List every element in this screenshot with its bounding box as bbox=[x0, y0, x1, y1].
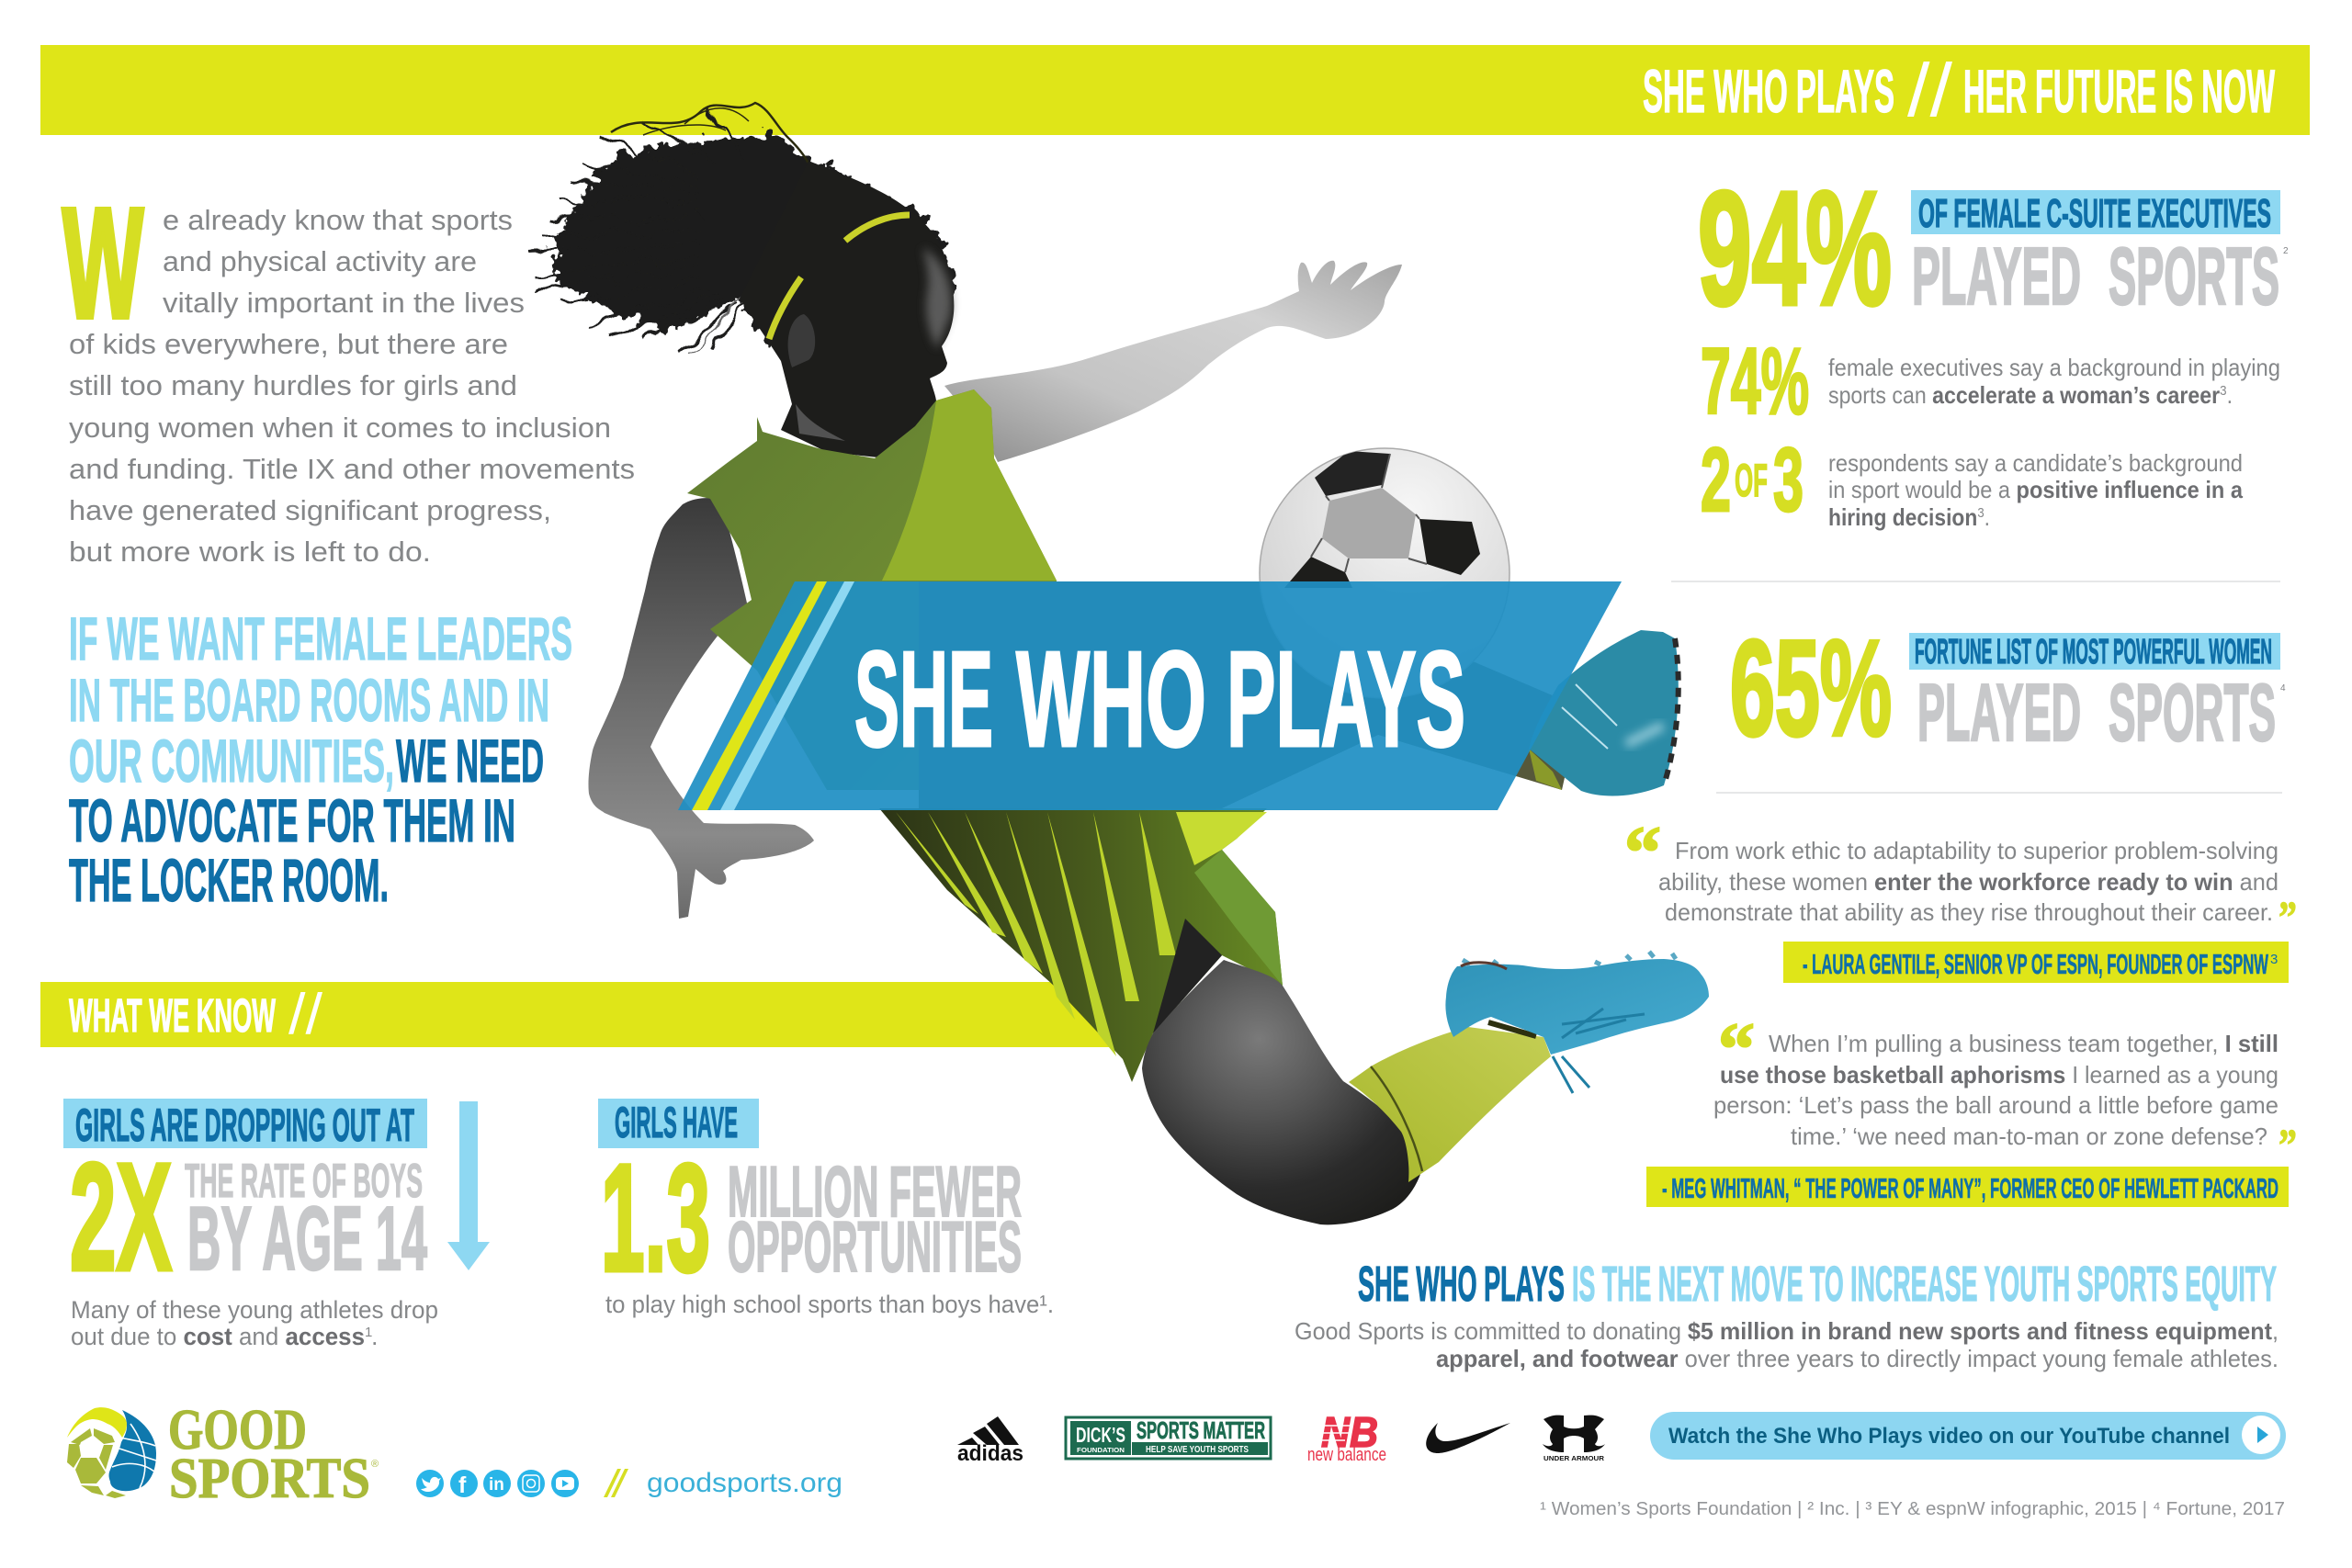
icon: linkedin bbox=[483, 1470, 511, 1497]
million fewer opportunities: MILLION FEWER bbox=[728, 1151, 1022, 1232]
footnotes: ¹ Women’s Sports Foundation | ² Inc. | ³ EY & espnW infographic, 2015 | ⁴ Fortune, 2017 bbox=[1540, 1499, 2285, 1519]
call to action headline: THE LOCKER ROOM. bbox=[69, 846, 389, 914]
quote one bbox=[1624, 813, 2297, 983]
stat: 94 percent bbox=[1698, 159, 2289, 339]
2 of 3 description: . bbox=[1984, 503, 1990, 531]
icon: facebook bbox=[450, 1470, 478, 1498]
shirt highlight bbox=[882, 389, 1057, 581]
quote text: use those basketball aphorisms I learned as a young bbox=[1720, 1061, 2278, 1089]
logo: dick's sports matter: DICK’S bbox=[1076, 1423, 1125, 1447]
logo wordmark: ® bbox=[371, 1459, 379, 1470]
logo wordmark: SPORTS bbox=[169, 1448, 370, 1510]
icon: play bbox=[2242, 1416, 2280, 1454]
logo: dick's sports matter: FOUNDATION bbox=[1077, 1448, 1125, 1454]
sock bbox=[1349, 1022, 1551, 1182]
player photo illustration bbox=[535, 103, 1709, 1224]
2 of 3 description bbox=[1828, 449, 2243, 531]
logo: adidas bbox=[957, 1416, 1023, 1466]
quote text: demonstrate that ability as they rise throughout their career. bbox=[1665, 898, 2273, 926]
intro paragraph: of kids everywhere, but there are bbox=[69, 328, 508, 360]
banner title bbox=[854, 624, 1465, 775]
logo: adidas: adidas bbox=[957, 1441, 1023, 1466]
number 2 of 3: OF bbox=[1735, 455, 1768, 506]
lower leg behind banner bbox=[919, 581, 1580, 808]
quote text: person: ‘Let’s pass the ball around a little before game bbox=[1713, 1091, 2278, 1119]
label: girls are dropping out bbox=[63, 1099, 427, 1151]
stat: dropping out at 2x bbox=[63, 1099, 490, 1350]
intro paragraph: vitally important in the lives bbox=[163, 287, 525, 319]
banner stripes bbox=[692, 581, 854, 810]
quote two bbox=[1646, 1010, 2297, 1207]
logo wordmark bbox=[168, 1399, 379, 1510]
what we know heading bbox=[69, 983, 323, 1046]
call to action headline: OUR COMMUNITIES, bbox=[69, 727, 394, 795]
shirt bbox=[687, 389, 1057, 790]
what we know heading: WHAT WE KNOW bbox=[69, 989, 276, 1042]
central banner bbox=[678, 581, 1622, 810]
call to action headline: IN THE BOARD ROOMS AND IN bbox=[69, 666, 549, 734]
number 74%: 74% bbox=[1701, 329, 1809, 434]
right arm bbox=[944, 261, 1402, 462]
what we know bar bbox=[40, 982, 1143, 1047]
dropout note: out due to cost and access bbox=[71, 1323, 365, 1350]
equity paragraph: Good Sports is committed to donating $5 million in brand new sports and fitness equipment, bbox=[1295, 1317, 2278, 1345]
front boot bbox=[1445, 952, 1709, 1093]
social icons bbox=[416, 1470, 579, 1498]
neck and face bbox=[740, 161, 954, 458]
played sports: PLAYED bbox=[1917, 667, 2081, 758]
stat: 65 percent bbox=[1730, 613, 2286, 764]
opportunities note: to play high school sports than boys have¹. bbox=[605, 1291, 1054, 1318]
arrow: down bbox=[447, 1101, 490, 1270]
logo ball bbox=[67, 1407, 156, 1498]
logo wordmark: GOOD bbox=[168, 1399, 307, 1461]
label: girls have: GIRLS HAVE bbox=[615, 1098, 738, 1146]
quote mark: “ bbox=[1718, 1010, 1755, 1090]
logo: new balance: NB bbox=[1321, 1408, 1378, 1456]
intro drop cap: W bbox=[62, 176, 143, 351]
2 of 3 description: respondents say a candidate’s background bbox=[1828, 449, 2243, 477]
quote text bbox=[1658, 837, 2278, 926]
attribution bbox=[1783, 942, 2289, 983]
shorts bbox=[879, 808, 1283, 1082]
icon: linkedin: in bbox=[489, 1475, 504, 1495]
call to action headline: TO ADVOCATE FOR THEM IN bbox=[69, 786, 515, 854]
good sports logo bbox=[67, 1399, 379, 1510]
header title bbox=[1643, 49, 2275, 132]
dropout note: 1 bbox=[365, 1325, 372, 1340]
2 of 3 description: 3 bbox=[1977, 505, 1984, 521]
quote text bbox=[1713, 1030, 2278, 1150]
left arm and hand bbox=[588, 498, 814, 919]
rear boot bbox=[1529, 630, 1679, 796]
logo: dick's sports matter bbox=[1066, 1416, 1271, 1459]
header title: // bbox=[1907, 49, 1952, 132]
header title: SHE WHO PLAYS bbox=[1643, 57, 1894, 125]
million fewer opportunities bbox=[728, 1151, 1022, 1287]
label: girls are dropping out: GIRLS ARE DROPPING OUT AT bbox=[75, 1100, 414, 1151]
number 2 of 3 bbox=[1701, 429, 1804, 530]
stat: 94 percent: 2 bbox=[2283, 246, 2289, 256]
call to action headline: IF WE WANT FEMALE LEADERS bbox=[69, 604, 572, 672]
header bar bbox=[40, 45, 2310, 135]
million fewer opportunities: OPPORTUNITIES bbox=[728, 1206, 1022, 1287]
intro paragraph: have generated significant progress, bbox=[69, 494, 551, 526]
dropout note: Many of these young athletes drop bbox=[71, 1296, 438, 1324]
label: girls have bbox=[598, 1098, 759, 1148]
stat: 65 percent: 4 bbox=[2280, 683, 2286, 694]
intro paragraph: but more work is left to do. bbox=[69, 536, 431, 568]
attribution: 3 bbox=[2270, 952, 2278, 967]
number 1.3: 1.3 bbox=[601, 1134, 710, 1303]
logo: dick's sports matter: HELP SAVE YOUTH SPORTS bbox=[1146, 1445, 1249, 1455]
74 percent description: . bbox=[2227, 381, 2233, 409]
intro paragraph bbox=[69, 204, 635, 568]
video button: Watch the She Who Plays video on our YouTube channel bbox=[1668, 1424, 2230, 1449]
logo: new balance: new balance bbox=[1307, 1445, 1386, 1465]
intro paragraph: and physical activity are bbox=[163, 245, 477, 277]
close quote: ” bbox=[2278, 891, 2297, 942]
intro paragraph: and funding. Title IX and other movements bbox=[69, 453, 635, 485]
quote text: When I’m pulling a business team together, I still bbox=[1769, 1030, 2278, 1057]
banner title: WHO bbox=[1016, 624, 1206, 775]
74 percent description: sports can accelerate a woman’s career bbox=[1828, 381, 2256, 409]
rate of boys text bbox=[185, 1155, 427, 1289]
number 65%: 65% bbox=[1730, 613, 1892, 764]
74 percent description: female executives say a background in playing bbox=[1828, 354, 2280, 381]
dropout note: . bbox=[371, 1323, 379, 1350]
equity paragraph bbox=[1295, 1317, 2278, 1372]
dropout note bbox=[71, 1296, 438, 1350]
logo: nike bbox=[1426, 1423, 1510, 1453]
call to action headline bbox=[69, 604, 572, 914]
intro paragraph: young women when it comes to inclusion bbox=[69, 412, 611, 444]
logo: under armour bbox=[1543, 1416, 1605, 1462]
quote text: From work ethic to adaptability to superior problem-solving bbox=[1675, 837, 2278, 864]
video button bbox=[1650, 1412, 2286, 1460]
logo: dick's sports matter: SPORTS MATTER bbox=[1136, 1416, 1265, 1444]
logo: new balance bbox=[1307, 1408, 1386, 1465]
intro paragraph: e already know that sports bbox=[163, 204, 513, 236]
icon: facebook: f bbox=[458, 1472, 467, 1498]
thigh bbox=[1142, 960, 1421, 1224]
stat: 74 percent bbox=[1701, 329, 2280, 434]
played sports: PLAYED bbox=[1912, 231, 2081, 321]
banner title: PLAYS bbox=[1227, 624, 1465, 775]
quote text: time.’ ‘we need man-to-man or zone defense? bbox=[1791, 1122, 2267, 1150]
icon: youtube bbox=[551, 1470, 579, 1497]
equity headline: SHE WHO PLAYS bbox=[1358, 1257, 1565, 1312]
headband bbox=[769, 215, 910, 339]
rate of boys text: BY AGE 14 bbox=[187, 1188, 427, 1289]
stat: 1.3 million fewer bbox=[598, 1098, 1054, 1318]
number 94%: 94% bbox=[1698, 159, 1892, 339]
icon: twitter bbox=[416, 1470, 444, 1497]
quote mark: “ bbox=[1624, 813, 1661, 894]
logo: under armour: UNDER ARMOUR bbox=[1544, 1456, 1604, 1462]
number 2x: 2X bbox=[70, 1133, 172, 1303]
hair bbox=[535, 103, 954, 367]
close quote: ” bbox=[2278, 1119, 2297, 1170]
website link: goodsports.org bbox=[647, 1468, 842, 1498]
74 percent description: 3 bbox=[2220, 383, 2227, 399]
icon: instagram bbox=[517, 1470, 545, 1497]
soccer ball bbox=[1260, 448, 1510, 698]
2 of 3 description: in sport would be a positive influence in a bbox=[1828, 476, 2243, 503]
stat: 2 of 3 bbox=[1701, 429, 2243, 531]
equity paragraph: apparel, and footwear over three years to directly impact young female athletes. bbox=[1436, 1345, 2278, 1372]
2 of 3 description: hiring decision bbox=[1828, 503, 1977, 531]
74 percent description bbox=[1828, 354, 2280, 409]
call to action headline: WE NEED bbox=[396, 727, 544, 795]
quote text: ability, these women enter the workforce ready to win and bbox=[1658, 868, 2278, 896]
what we know heading: // bbox=[288, 983, 323, 1046]
number 2 of 3: 2 bbox=[1701, 429, 1731, 530]
rate of boys text: THE RATE OF BOYS bbox=[185, 1155, 423, 1208]
intro paragraph: still too many hurdles for girls and bbox=[69, 369, 517, 401]
number 2 of 3: 3 bbox=[1773, 429, 1804, 530]
banner title: SHE bbox=[854, 624, 993, 775]
